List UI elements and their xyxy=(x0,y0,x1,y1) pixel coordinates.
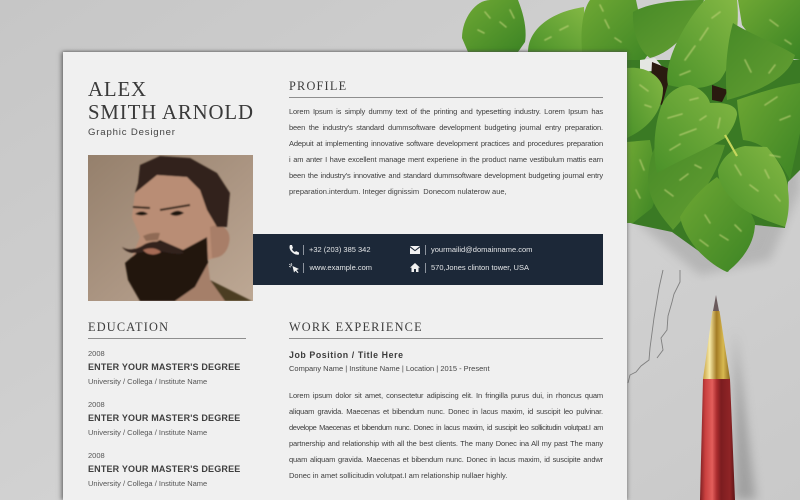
text block: profile summary xyxy=(289,107,604,196)
text block: profile summary: i am anter I have excellent manage ment experiene in the product name vestibulum mattis earn xyxy=(289,155,603,164)
plant: pale variegation streaks xyxy=(478,5,791,246)
text: email: yourmailid@domainname.com xyxy=(431,245,532,254)
portrait photo xyxy=(88,155,253,301)
contact bar xyxy=(253,234,603,285)
job title: Job Position / Title Here xyxy=(289,350,404,360)
education entry 2 xyxy=(88,400,240,437)
year: 2008 xyxy=(88,400,105,409)
degree: ENTER YOUR MASTER'S DEGREE xyxy=(88,362,240,372)
text: phone: +32 (203) 385 342 xyxy=(309,245,371,254)
plant shadow xyxy=(630,70,800,275)
text block: job description: Donec in amet sollicitudin volutpat.I am relationship nullaer highly. xyxy=(289,471,507,480)
text: website: www.example.com xyxy=(310,263,372,272)
section heading: work experience: WORK EXPERIENCE xyxy=(289,320,423,334)
education entry 1 xyxy=(88,349,240,386)
panel: resume page xyxy=(63,52,627,500)
pen xyxy=(700,295,756,500)
text block: job description: develope Maecenas et bibendum nunc. Donec in lacus maxim, id suscipit leo sollicitudin volutpat.I am xyxy=(289,423,603,432)
institute: University / Collega / Institute Name xyxy=(88,428,207,437)
year: 2008 xyxy=(88,349,105,358)
text block: job description: quam aliquam gravida. Maecenas et bibendum nunc. Donec in lacus maxim, id suscipite andwr xyxy=(289,455,603,464)
text block: job description xyxy=(289,391,604,480)
text block: profile summary: been the industry's standard dummsoftware development budgeting journal entry preparation. xyxy=(289,123,603,132)
subtitle: role: Graphic Designer xyxy=(88,126,176,138)
icon: cursor xyxy=(289,263,299,273)
institute: University / Collega / Institute Name xyxy=(88,377,207,386)
text block: job description: aliquam gravida. Maecenas et bibendum nunc. Donec in lacus maxim, id suscipit leo pulvinar. xyxy=(289,407,603,416)
text block: profile summary: preparation.interdum. Integer dignissim Donecom nulaterow aue, xyxy=(289,187,507,196)
title: name xyxy=(88,78,254,124)
icon: envelope xyxy=(410,246,420,254)
text block: profile summary: Lorem Ipsum is simply dummy text of the printing and typesetting industry. Lorem Ipsum has xyxy=(289,107,603,116)
section heading: education: EDUCATION xyxy=(88,320,169,334)
text: address: 570,Jones clinton tower, USA xyxy=(431,263,529,272)
degree: ENTER YOUR MASTER'S DEGREE xyxy=(88,413,240,423)
text block: profile summary: been the industry's innovative and standard dummsoftware development budgeting journal entry xyxy=(289,171,603,180)
year: 2008 xyxy=(88,451,105,460)
wall cracks xyxy=(628,270,680,383)
section heading: profile: PROFILE xyxy=(289,79,347,93)
institute: University / Collega / Institute Name xyxy=(88,479,207,488)
title: name: ALEX xyxy=(88,78,147,100)
text block: profile summary: Adepuit at implementing innovative software development practices and procedures preparation xyxy=(289,139,603,148)
education entry 3 xyxy=(88,451,240,488)
icon: phone xyxy=(290,245,299,255)
icon: house xyxy=(410,263,420,272)
text block: job description: partnership and relationship with all the best clients. The many Donec ina All my past The many xyxy=(289,439,603,448)
job meta: Company Name | Institune Name | Location | 2015 - Present xyxy=(289,364,490,373)
degree: ENTER YOUR MASTER'S DEGREE xyxy=(88,464,240,474)
plant: leaves xyxy=(462,0,800,272)
separators xyxy=(303,245,426,273)
title: name: SMITH ARNOLD xyxy=(88,100,254,124)
text block: job description: Lorem ipsum dolor sit amet, consectetur adipiscing elit. In fringilla purus dui, in rhoncus quam xyxy=(289,391,603,400)
